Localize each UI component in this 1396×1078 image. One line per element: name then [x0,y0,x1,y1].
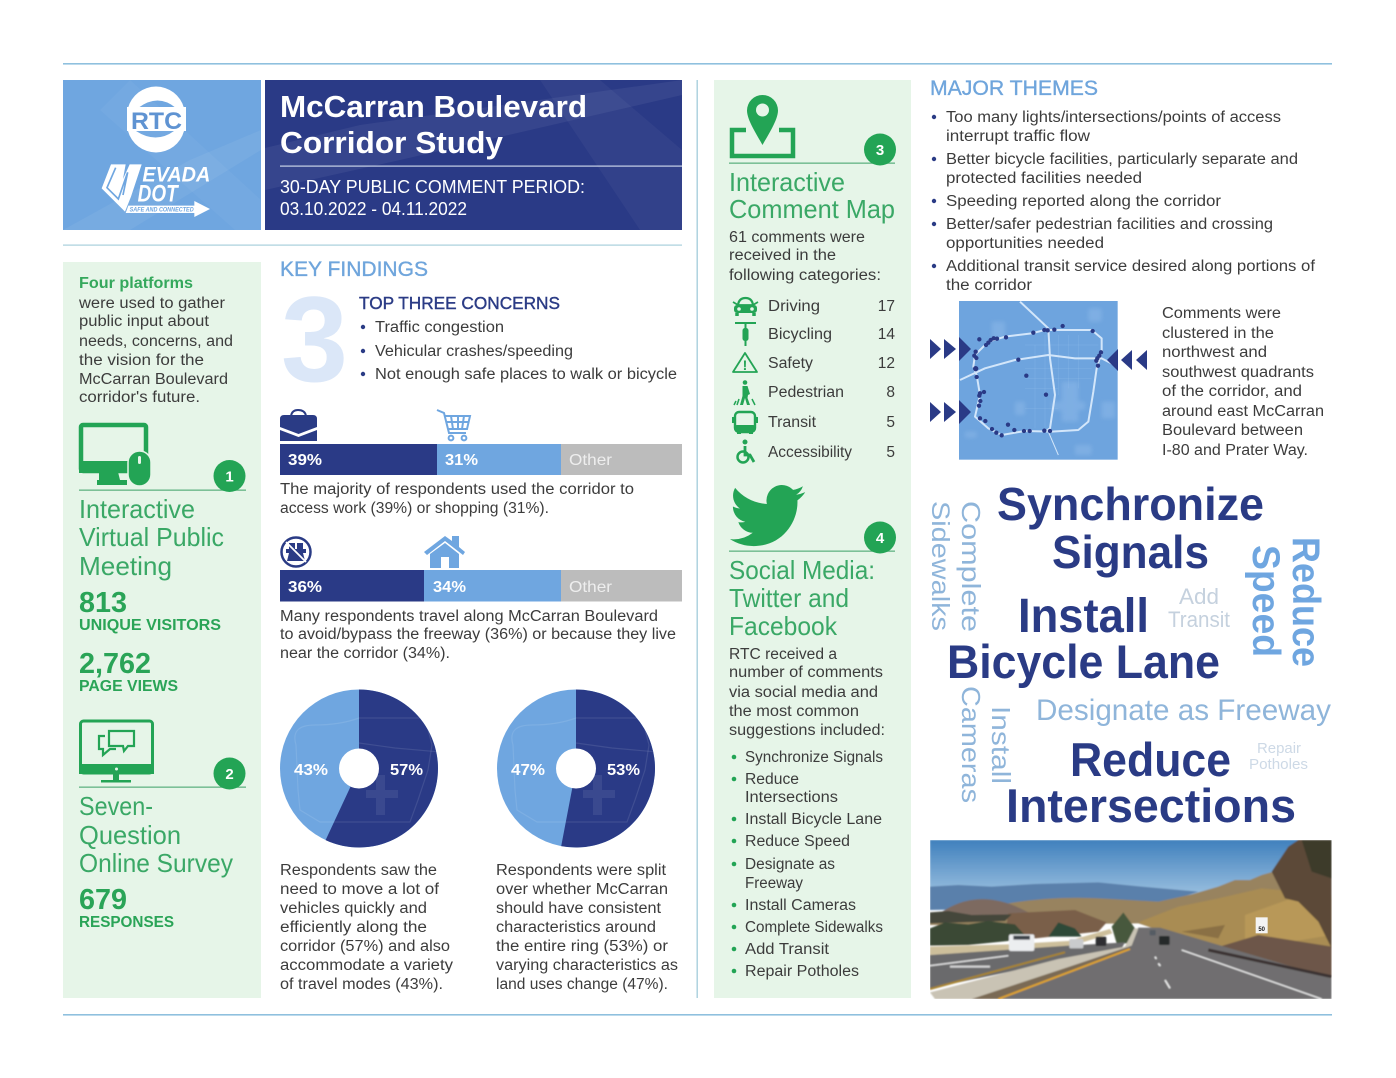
stat: page views: 2,762 [79,648,151,680]
icon: bus [733,412,757,434]
heading: key findings: KEY FINDINGS [280,258,428,281]
major themes list: Better/safer pedestrian facilities and crossing [946,216,1273,233]
photo: McCarran Boulevard highway [930,840,1332,999]
bar chart: access purpose: Other [569,452,613,469]
word cloud [926,478,1331,832]
major themes list [932,109,1316,294]
stat: unique visitors [79,587,221,634]
major themes list: Too many lights/intersections/points of access [946,109,1281,126]
suggestions list: Designate as [745,856,835,873]
icon: survey monitor [79,721,154,782]
arrows: southwest [930,400,971,424]
major themes list: Better bicycle facilities, particularly separate and [946,151,1298,168]
top three concerns: TOP THREE CONCERNS [359,293,560,313]
suggestions list: Reduce Speed [745,833,850,850]
pie chart: 53 / 47: 53% [607,762,640,779]
comment period: 03.10.2022 - 04.11.2022 [280,199,467,219]
text: four platforms intro [78,275,233,406]
badge 3: 3 [876,142,884,159]
word cloud: Add [1179,584,1219,609]
text: pie 1 caption: Respondents saw the [280,862,437,879]
icon: pedestrian [734,380,755,405]
comment period: 30-DAY PUBLIC COMMENT PERIOD: [280,177,585,197]
major themes list: the corridor [946,277,1032,294]
heading: social media: Twitter and [729,583,849,613]
big numeral 3: 3 [281,271,348,407]
suggestions list: Repair Potholes [745,963,859,980]
comment categories list: 5 [886,444,895,461]
stat: page views [79,648,178,695]
major themes list: opportunities needed [946,235,1104,252]
pie chart: 57 / 43: 43% [294,762,328,779]
word cloud: Synchronize [997,478,1264,530]
text: comments intro [729,229,881,284]
top three concerns: Vehicular crashes/speeding [375,343,573,360]
logo: RTC [127,87,186,152]
badge 2 [214,758,246,790]
suggestions list: Synchronize Signals [745,749,883,766]
word cloud: Designate as Freeway [1036,694,1331,727]
text: clusters description: I-80 and Prater Way. [1162,442,1308,459]
heading: online survey: Online Survey [79,848,233,878]
heading: social media: Facebook [729,611,838,641]
text: pie 2 caption: varying characteristics as [496,957,678,974]
text: four platforms intro: McCarran Boulevard [79,371,228,388]
text: clusters description: Boulevard between [1162,422,1303,439]
text: pie 1 caption: efficiently along the [280,919,427,936]
icon: twitter bird [730,485,805,546]
text: access finding: The majority of respondents used the corridor to [280,481,634,498]
heading: social media: Social Media: [729,555,875,585]
word cloud: Reduce [1284,537,1327,667]
comment categories list: Transit [768,414,817,431]
text: pie 1 caption: vehicles quickly and [280,900,427,917]
heading: social media [729,555,875,641]
text: social intro: number of comments [729,664,883,681]
text: social intro: via social media and [729,684,878,701]
photo: McCarran Boulevard highway: 50 [1258,927,1266,933]
icon: bicycle [735,323,756,346]
pie chart: 57 / 43 [280,690,440,848]
word cloud: Signals [1052,526,1209,578]
text: four platforms intro: corridor's future. [79,389,200,406]
word cloud: Cameras [956,686,986,803]
word cloud: Repair [1257,740,1301,757]
icon: briefcase [280,410,317,441]
comment categories list: Safety [768,355,813,372]
text: travel finding [280,608,676,662]
text: comments intro: following categories: [729,267,881,284]
word cloud: Speed [1244,545,1287,657]
text: four platforms intro: public input about [79,313,210,330]
bar chart: travel reason: Other [569,579,613,596]
badge 1 [214,460,246,492]
panel: platforms [63,262,261,998]
heading: virtual meeting: Meeting [79,551,172,581]
text: clusters description: Comments were [1162,305,1281,322]
text: social intro: the most common [729,703,859,720]
word cloud: Install [1018,590,1149,643]
comment categories list: 17 [878,298,895,315]
text: access finding: access work (39%) or shopping (31%). [280,500,549,517]
suggestions list [732,749,883,980]
icon: no freeway [282,538,310,566]
icon: car [733,298,758,316]
logo: Nevada DOT: EVADA [142,164,210,187]
heading: comment map: Interactive [729,167,845,197]
text: clusters description [1162,305,1324,459]
icon: monitor and mouse [79,425,151,486]
major themes list: Speeding reported along the corridor [946,193,1221,210]
comment categories list: 8 [886,384,895,401]
text: pie 2 caption [496,862,678,993]
text: clusters description: southwest quadrants [1162,364,1314,381]
word cloud: Sidewalks [926,501,954,631]
comment categories list: 14 [878,326,895,343]
suggestions list: Install Cameras [745,897,856,914]
word cloud: Reduce [1070,733,1231,786]
comment categories list: Pedestrian [768,384,844,401]
text: travel finding: Many respondents travel along McCarran Boulevard [280,608,658,625]
suggestions list: Reduce [745,771,799,788]
stat: responses: RESPONSES [79,914,174,931]
bar chart: access purpose [280,444,682,475]
text: pie 2 caption: over whether McCarran [496,881,668,898]
comment period [280,177,585,219]
arrows: east [1107,349,1147,371]
word cloud: Bicycle Lane [947,635,1220,688]
pie chart: 53 / 47 [497,690,657,848]
suggestions list: Add Transit [745,941,830,958]
bar chart: travel reason: 36% [288,579,322,596]
text: four platforms intro: needs, concerns, and [79,333,233,350]
bar chart: travel reason: 34% [433,579,466,596]
stat: responses: 679 [79,884,127,916]
comment categories list: 5 [886,414,895,431]
logo: Nevada DOT [102,164,210,217]
heading: comment map [729,167,895,224]
comment categories list: 12 [878,355,895,372]
top three concerns: Traffic congestion [375,319,504,336]
text: pie 2 caption: land uses change (47%). [496,976,668,993]
comment categories list: Driving [768,298,820,315]
comment categories list: Accessibility [768,444,852,461]
title: Corridor Study [280,125,504,160]
text: social intro: RTC received a [729,646,837,663]
text: access finding [280,481,634,517]
icon: map pin [732,95,793,156]
text: social intro: suggestions included: [729,722,885,739]
major themes list: Additional transit service desired along portions of [946,258,1316,275]
stat: page views: PAGE VIEWS [79,678,178,695]
text: pie 1 caption: of travel modes (43%). [280,976,443,993]
heading: virtual meeting [79,494,224,581]
text: four platforms intro: were used to gather [78,295,225,312]
arrows: northwest [930,337,971,361]
text: pie 2 caption: Respondents were split [496,862,667,879]
top three concerns [359,293,677,383]
text: pie 1 caption [280,862,453,993]
heading: online survey: Seven- [79,791,153,821]
map: comment clusters [959,301,1118,460]
logo: RTC: RTC [131,108,182,135]
suggestions list: Complete Sidewalks [745,919,883,936]
text: pie 1 caption: accommodate a variety [280,957,453,974]
stat: unique visitors: 813 [79,587,127,619]
title banner [265,80,682,230]
text: comments intro: received in the [729,247,836,264]
word cloud: Potholes [1249,756,1308,773]
text: clusters description: clustered in the [1162,325,1274,342]
text: pie 1 caption: corridor (57%) and also [280,938,450,955]
badge 2: 2 [225,766,234,783]
text: clusters description: of the corridor, and [1162,383,1302,400]
comment categories list: Bicycling [768,326,832,343]
suggestions list: Install Bicycle Lane [745,811,882,828]
text: pie 2 caption: the entire ring (53%) or [496,938,668,955]
badge 1: 1 [225,468,234,486]
title [280,89,587,160]
pie chart: 53 / 47: 47% [511,762,545,779]
bar chart: access purpose: 31% [445,452,478,469]
icon: warning triangle [733,353,757,373]
heading: comment map: Comment Map [729,194,895,224]
heading: major themes: MAJOR THEMES [930,77,1098,100]
suggestions list: Intersections [745,789,838,806]
heading: virtual meeting: Interactive [79,494,195,524]
stat: unique visitors: UNIQUE VISITORS [79,617,221,634]
badge 4 [864,522,896,554]
comment categories list [733,298,895,462]
word cloud: Install [986,706,1016,784]
text: travel finding: to avoid/bypass the freeway (36%) or because they live [280,626,676,643]
badge 4: 4 [876,530,885,547]
icon: house [424,536,465,568]
text: four platforms intro: Four platforms [79,275,193,292]
word cloud: Intersections [1006,779,1296,832]
heading: online survey [79,791,233,878]
stat: responses [79,884,174,931]
title: McCarran Boulevard [280,89,587,124]
icon: accessibility [738,440,754,462]
heading: online survey: Question [79,820,181,850]
icon: warning triangle: ! [743,357,747,373]
logo: Nevada DOT: DOT [138,181,180,208]
text: travel finding: near the corridor (34%). [280,645,450,662]
top three concerns: Not enough safe places to walk or bicycle [375,366,677,383]
major themes list: interrupt traffic flow [946,128,1091,145]
icon: shopping cart [437,410,470,440]
suggestions list: Freeway [745,875,803,892]
pie chart: 57 / 43: 57% [390,762,423,779]
logo: Nevada DOT: SAFE AND CONNECTED [130,207,194,214]
panel: map and social [714,80,911,998]
text: pie 1 caption: need to move a lot of [280,881,440,898]
word cloud: Transit [1168,607,1230,632]
text: clusters description: northwest and [1162,344,1267,361]
word cloud: Complete [956,501,986,632]
text: four platforms intro: the vision for the [79,352,204,369]
badge 3 [864,134,896,166]
text: pie 2 caption: should have consistent [496,900,662,917]
text: clusters description: around east McCarran [1162,403,1324,420]
text: social intro [729,646,885,739]
logo panel [63,80,261,230]
bar chart: access purpose: 39% [288,452,322,469]
heading: virtual meeting: Virtual Public [79,522,224,552]
bar chart: travel reason [280,570,682,602]
text: pie 2 caption: characteristics around [496,919,656,936]
major themes list: protected facilities needed [946,170,1142,187]
text: comments intro: 61 comments were [729,229,865,246]
